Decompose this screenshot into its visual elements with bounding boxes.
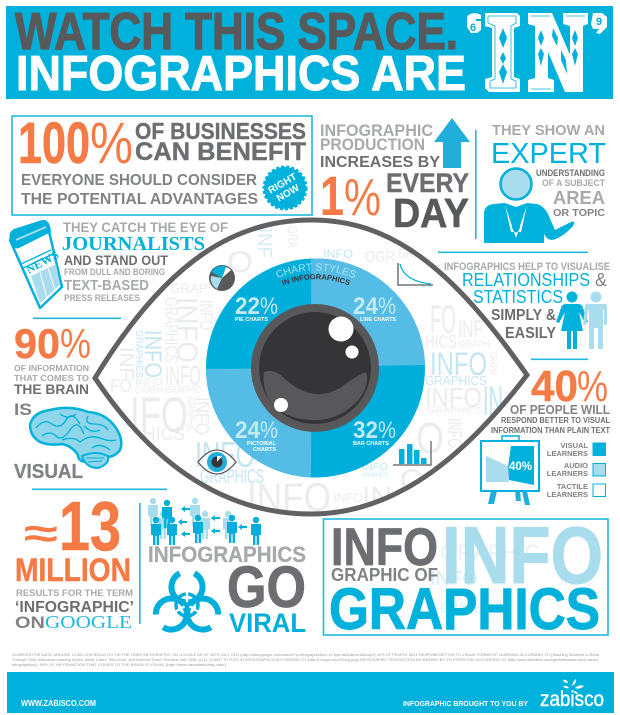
- text: the potential advantages: THE POTENTIAL ADVANTAGES: [21, 191, 258, 208]
- background word cloud: GRAPHICS: [362, 473, 388, 479]
- background word cloud: GRAPHICS: [133, 330, 144, 378]
- panel: 90 percent visual: [14, 320, 121, 483]
- icon: small eye: [198, 450, 236, 474]
- text: increases by: INCREASES BY: [320, 154, 440, 171]
- badge: right now: RIGHT: [267, 172, 299, 197]
- text: of businesses: OF BUSINESSES: [135, 118, 306, 144]
- text: on: ON: [15, 613, 45, 632]
- stat: 1: 1: [320, 164, 344, 227]
- legend: visual learners: [547, 441, 606, 458]
- background word cloud: INFO: [333, 491, 363, 505]
- background word cloud: INF: [253, 228, 275, 258]
- label: 24 percent line charts: LINE CHARTS: [360, 317, 396, 323]
- background word cloud: GRAPH: [458, 339, 490, 349]
- icon: presentation board: 40%: [509, 461, 532, 473]
- divider line: [139, 503, 141, 624]
- text: simply and: SIMPLY &: [491, 307, 556, 324]
- panel: 13 million: [15, 487, 134, 632]
- icon: line chart: [398, 263, 433, 285]
- footer bar: [7, 672, 614, 713]
- panel: 100 percent of businesses: [12, 111, 312, 215]
- legend: audio learners: [547, 461, 606, 478]
- label: 22 percent pie charts: PIE CHARTS: [235, 317, 268, 323]
- panel: relationships and statistics: [444, 261, 610, 349]
- background word cloud: INFO: [195, 434, 255, 475]
- text: brought to you by: INFOGRAPHIC BROUGHT TO YOU BY: [403, 699, 528, 708]
- text: easily: EASILY: [505, 325, 556, 342]
- background word cloud: INFO: [430, 346, 487, 382]
- background word cloud: INFO: [425, 382, 482, 413]
- text: of information: OF INFORMATION: [14, 363, 89, 373]
- text: viral: VIRAL: [229, 608, 306, 638]
- text: of a subject: OF A SUBJECT: [542, 178, 605, 189]
- background word cloud: GRAPH: [135, 385, 163, 396]
- stat: percent: %: [577, 362, 608, 411]
- iris with chart quadrants: [206, 258, 425, 478]
- legend: tactile learners: [547, 482, 606, 499]
- panel: 40 percent learners: [481, 362, 610, 505]
- text: press releases: PRESS RELEASES: [64, 293, 140, 304]
- box word cloud: GRAPHICS: [440, 601, 503, 615]
- text: they catch the eye of: THEY CATCH THE EYE OF: [63, 219, 228, 235]
- legend: visual learners: VISUAL: [560, 441, 588, 450]
- label: 24 percent line charts: 24: [353, 293, 379, 320]
- background word cloud: GRAPHICS: [200, 466, 264, 488]
- eye diagram: [92, 218, 530, 516]
- background word cloud: GRAPHIC: [184, 397, 198, 433]
- divider line: [32, 488, 167, 490]
- label: 24 percent pictorial charts: PICTORIAL: [247, 441, 277, 447]
- background word cloud: [110, 226, 503, 520]
- text: of people will: OF PEOPLE WILL: [510, 402, 610, 417]
- decorative word IN: 6: [470, 22, 476, 34]
- pupil: [251, 304, 379, 432]
- text: text-based: TEXT-BASED: [64, 277, 149, 294]
- stat: 13: 13: [59, 487, 121, 565]
- text: info grey: INFO: [331, 518, 438, 577]
- text: expert: EXPERT: [491, 138, 606, 170]
- text: day: DAY: [393, 190, 469, 236]
- decorative word IN: [467, 0, 607, 112]
- eye outline: [95, 220, 527, 514]
- chart subtitle: in infographics: IN INFOGRAPHICS: [282, 274, 350, 286]
- text: or topic: OR TOPIC: [553, 208, 605, 219]
- label: 22 percent pie charts: %: [260, 293, 278, 320]
- background word cloud: GRAPHICS: [161, 297, 181, 363]
- text: visual: VISUAL: [14, 461, 83, 483]
- background word cloud: INFO: [139, 330, 166, 378]
- panel: info graphic of info graphics: [324, 511, 608, 642]
- background word cloud: O: [416, 414, 444, 463]
- legend: visual learners: LEARNERS: [547, 449, 588, 458]
- text: journalists: JOURNALISTS: [62, 233, 205, 255]
- label: 24 percent line charts: %: [378, 293, 396, 320]
- label: 24 percent pictorial charts: CHARTS: [253, 447, 276, 453]
- background word cloud: FO: [430, 298, 456, 342]
- text: production: PRODUCTION: [320, 135, 425, 154]
- icon: up arrow: [434, 118, 470, 168]
- background word cloud: O: [400, 464, 424, 497]
- stat: 100: 100: [18, 111, 90, 176]
- background word cloud: GRA: [285, 226, 301, 248]
- heading: infographics are: INFOGRAPHICS ARE: [16, 47, 466, 101]
- text: results for the term: RESULTS FOR THE TERM: [16, 588, 133, 599]
- icon: rolled newspaper: NEWS: [23, 247, 61, 277]
- text: area: AREA: [553, 188, 605, 208]
- background word cloud: INFO: [170, 297, 203, 363]
- text: IN: [483, 377, 503, 424]
- label: 32 percent bar charts: 32: [353, 417, 378, 444]
- background word cloud: GRAPH: [487, 352, 498, 374]
- box word cloud: INFO: [430, 568, 478, 590]
- text: can benefit: CAN BENEFIT: [135, 138, 306, 166]
- stat: percent: %: [344, 169, 381, 227]
- text: understanding: UNDERSTANDING: [536, 168, 605, 178]
- text: infographic quote: ‘INFOGRAPHIC’: [15, 599, 134, 616]
- background word cloud: INF: [458, 316, 483, 343]
- background word cloud: INFO: [323, 247, 353, 261]
- panel: journalists: [10, 219, 228, 308]
- text: and stand out: AND STAND OUT: [64, 252, 168, 268]
- sources text: Through Their Individual Learning Styles, Marie Carbo, Rita Dunn, and Kenneth Dunn; Prentice Hall, 1986, p13). CHART STYLES IN INFOGRAPHICS ACCORDING TO (http://i.imgur.com/D1leg.png) INFOGRAPHIC PRODUCTION INCREASES BY 1% EVERY DAY ACCORDING TO (http://www.bitrebels.com/geek/fantastic-facts-about-: [12, 658, 599, 662]
- text: graphic of: GRAPHIC OF: [331, 565, 438, 585]
- text: ampersand: &: [595, 270, 607, 290]
- text: information than plain text: INFORMATION THAN PLAIN TEXT: [491, 426, 610, 435]
- background word cloud: HICS: [425, 332, 457, 352]
- chart title: chart styles: CHART STYLES: [276, 263, 356, 278]
- stat: percent: %: [60, 320, 91, 367]
- text: every: EVERY: [386, 168, 469, 198]
- background word cloud: INFO: [196, 300, 216, 330]
- background word cloud: INFO: [247, 476, 331, 520]
- background word cloud: INF: [115, 347, 137, 380]
- legend: tactile learners: TACTILE: [557, 482, 588, 491]
- text: infographic: INFOGRAPHIC: [320, 121, 433, 140]
- text: million: MILLION: [15, 552, 131, 588]
- text: from dull and boring: FROM DULL AND BORING: [64, 267, 165, 278]
- stat: 40: 40: [531, 362, 578, 411]
- legend: audio learners: LEARNERS: [547, 469, 588, 478]
- badge: right now: [264, 167, 306, 209]
- header banner: [6, 0, 613, 112]
- icon: pie chart: [209, 265, 235, 291]
- label: 22 percent pie charts: 22: [235, 293, 260, 320]
- legend: tactile learners: LEARNERS: [547, 490, 588, 499]
- text: is: IS: [14, 400, 32, 419]
- text: infographics: INFOGRAPHICS: [148, 542, 306, 567]
- panel: production increases: [320, 118, 470, 236]
- background word cloud: OGR: [365, 249, 395, 266]
- icon: expert person: [484, 168, 574, 243]
- box word cloud: INFO: [560, 572, 594, 588]
- icon: bar chart: [393, 441, 431, 465]
- icon: presentation board: [481, 436, 539, 505]
- divider line: [33, 318, 121, 319]
- label: 32 percent bar charts: [353, 417, 396, 447]
- text: respond better: RESPOND BETTER TO VISUAL: [501, 416, 610, 425]
- background word cloud: GRAPHICS: [425, 373, 487, 388]
- text: that comes to: THAT COMES TO: [14, 373, 89, 383]
- icon: brain: [30, 408, 121, 468]
- background word cloud: GRAP: [398, 245, 428, 261]
- logo: zabisco: [540, 679, 604, 711]
- label: 32 percent bar charts: BAR CHARTS: [353, 441, 389, 447]
- sources text: infographics/). 90% OF INFORMATION THAT COMES TO THE BRAIN IS VISUAL (http://www.visualteaching.com/): [12, 663, 226, 667]
- background word cloud: INFO: [443, 418, 465, 448]
- text: relationships: RELATIONSHIPS: [462, 270, 590, 290]
- icon: biohazard: [152, 573, 222, 634]
- label: 24 percent line charts: [353, 293, 396, 323]
- text: website: WWW.ZABISCO.COM: [21, 699, 96, 708]
- background word cloud: IN: [362, 481, 392, 512]
- divider line: [531, 358, 588, 360]
- background word cloud: FO: [110, 376, 132, 396]
- logo: zabisco: zabisco: [540, 688, 604, 711]
- label: 24 percent pictorial charts: 24: [235, 417, 261, 444]
- background word cloud: GRAP: [170, 280, 208, 296]
- text: everyone should consider: EVERYONE SHOULD CONSIDER: [21, 172, 257, 189]
- text: they show an: THEY SHOW AN: [492, 122, 605, 139]
- background word cloud: GRAPHIC: [165, 385, 201, 396]
- icon: spreading people: [148, 498, 261, 545]
- label: 22 percent pie charts: [235, 293, 278, 323]
- text: go: GO: [227, 555, 306, 620]
- text: the brain: THE BRAIN: [14, 382, 89, 397]
- panel: infographics go viral: [148, 498, 306, 638]
- background word cloud: GRAPHICS: [427, 406, 482, 415]
- label: 32 percent bar charts: %: [378, 417, 396, 444]
- text: statistics: STATISTICS: [473, 287, 563, 307]
- text: google: GOOGLE: [45, 612, 132, 632]
- background word cloud: HICS: [143, 424, 185, 444]
- box word cloud: INFO: [335, 619, 373, 636]
- heading: watch this space: WATCH THIS SPACE.: [15, 3, 458, 61]
- label: 24 percent pictorial charts: [235, 417, 278, 453]
- stat: percent sign: %: [90, 111, 133, 176]
- sources text: [12, 653, 599, 667]
- decorative word IN: 9: [596, 16, 602, 28]
- background word cloud: INFO: [135, 377, 163, 388]
- badge: right now: NOW: [275, 182, 302, 205]
- divider line: [475, 130, 477, 239]
- background word cloud: INFO: [192, 397, 212, 435]
- icon: man: [583, 292, 607, 349]
- background word cloud: IFO: [130, 387, 188, 443]
- background word cloud: INFO: [165, 360, 201, 391]
- divider line: [438, 252, 588, 253]
- stat: approximately: ≈: [24, 512, 58, 556]
- icon: rolled newspaper: [10, 220, 62, 308]
- label: 24 percent pictorial charts: %: [260, 417, 278, 444]
- background word cloud: O: [227, 246, 253, 279]
- icon: woman: [556, 292, 588, 349]
- stat: 90: 90: [14, 320, 60, 367]
- panel: expert: [484, 122, 606, 243]
- sources text: SOURCES FOR DATA: AROUND 13 MILLION RESULTS FOR THE TERM 'INFOGRAPHIC' ON GOOGLE AS OF 18TH JULY 2011 (http://www.google.com/search?q=infographic&rlz=1I7ignz-all&client=all&aq=f) 40% OF PEOPLE WILL RESPOND BETTER TO VISUAL FORMS OF LEARNING ACCORDING TO (Teaching Students to Read: [12, 653, 599, 657]
- background word cloud: INFO: [362, 462, 388, 473]
- box word cloud: GRAPHIC: [440, 540, 540, 565]
- box word cloud: [335, 540, 594, 636]
- legend: audio learners: AUDIO: [564, 461, 588, 470]
